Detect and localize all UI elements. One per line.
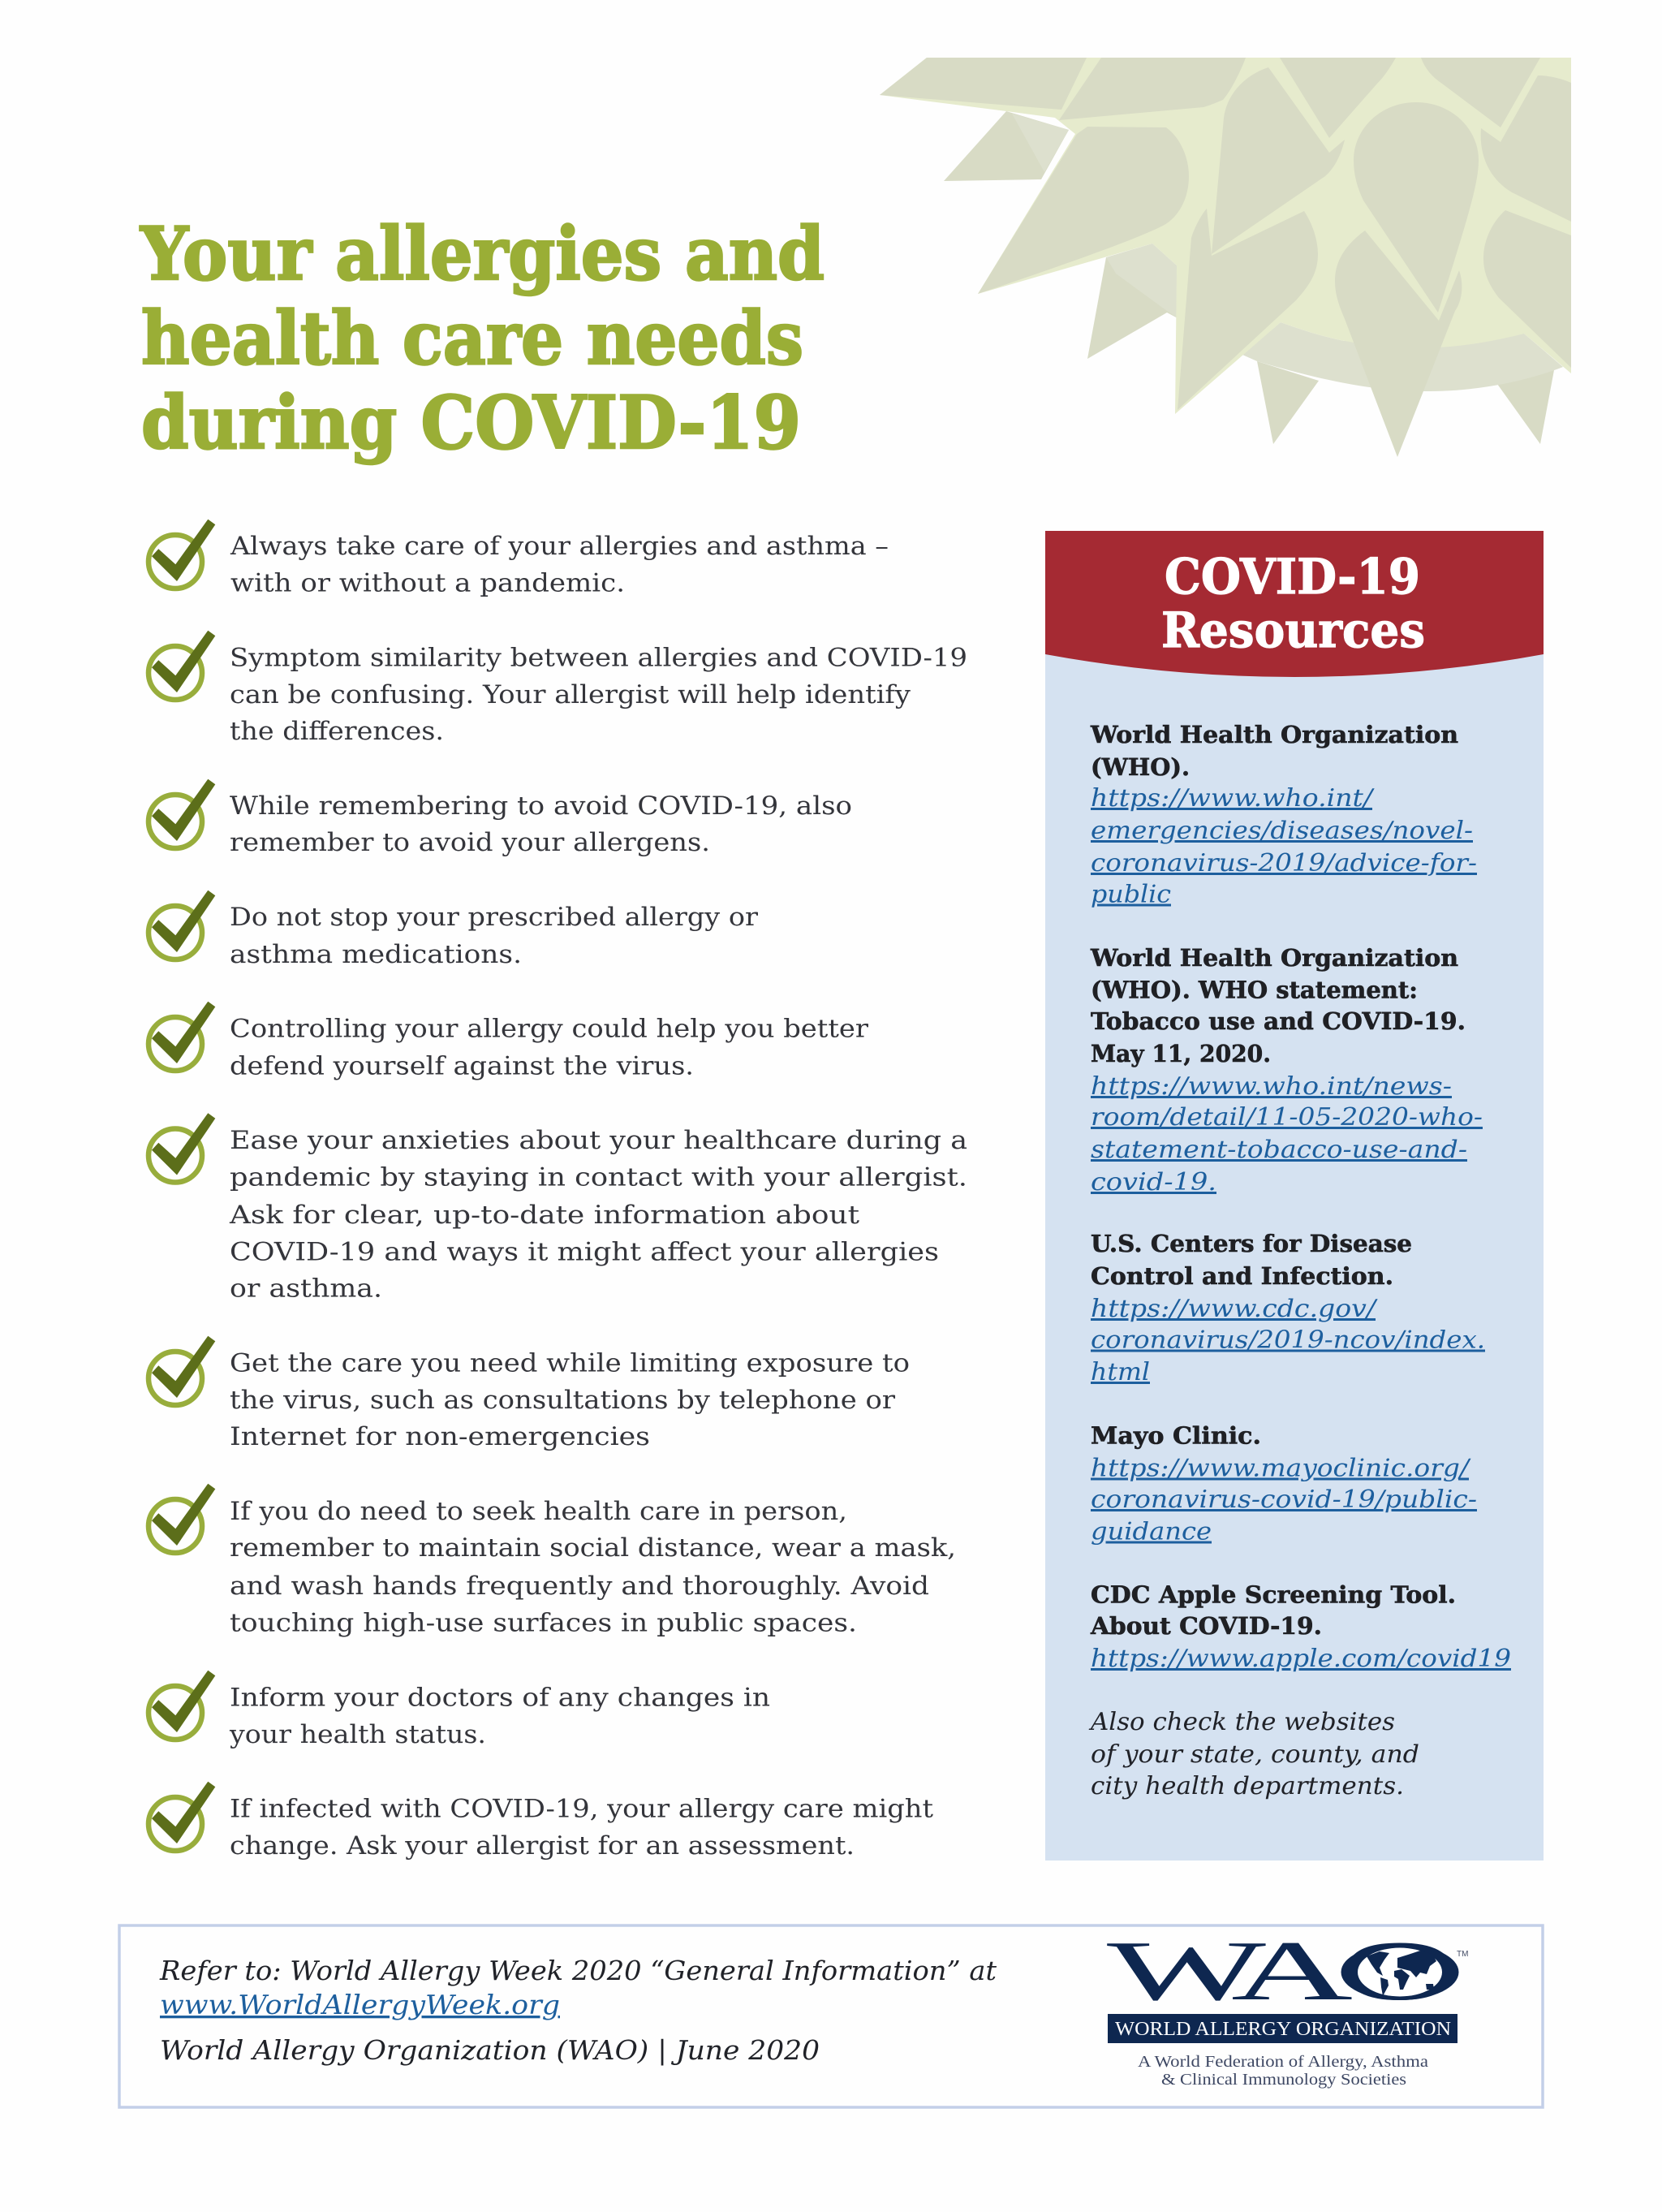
resource note: city health departments. — [1091, 1772, 1404, 1800]
footer reference text: World Allergy Organization (WAO) | June 2020 — [160, 2034, 820, 2066]
checklist item 3: remember to avoid your allergens. — [230, 828, 710, 857]
resource: CDC Apple screening tool: https://www.apple.com/covid19 — [1091, 1645, 1511, 1673]
resource: CDC Apple screening tool — [1090, 1581, 1511, 1673]
checklist item 7: Get the care you need while limiting exposure to — [230, 1349, 910, 1378]
title: Your allergies and — [140, 211, 825, 297]
resource: CDC — [1091, 1230, 1485, 1386]
checklist item 9 — [149, 1671, 770, 1749]
resource: WHO tobacco statement: World Health Organization — [1090, 944, 1458, 972]
resource: CDC: Control and Infection. — [1091, 1262, 1393, 1290]
panel header: Resources — [1161, 602, 1425, 659]
resource: WHO advice: (WHO). — [1091, 753, 1190, 781]
footer reference text: Refer to: World Allergy Week 2020 “General Information” at — [159, 1955, 997, 1986]
resource: WHO advice: https://www.who.int/ — [1091, 784, 1375, 813]
checklist item 7 — [149, 1336, 910, 1451]
checklist item 1: Always take care of your allergies and asthma – — [230, 532, 889, 561]
panel header — [1045, 531, 1544, 677]
checklist item 4 — [149, 890, 758, 969]
checklist item 1: with or without a pandemic. — [230, 568, 625, 597]
checklist item 3 — [149, 779, 852, 857]
checklist item 2 — [149, 631, 967, 746]
resource: Mayo Clinic: coronavirus-covid-19/public- — [1091, 1485, 1477, 1514]
resource note — [1088, 1708, 1419, 1800]
virus illustration — [880, 58, 1571, 457]
checklist item 9: your health status. — [229, 1720, 486, 1749]
checklist item 1 — [149, 520, 889, 597]
checklist item 7: Internet for non-emergencies — [230, 1422, 650, 1451]
checklist item 10: change. Ask your allergist for an assessment. — [230, 1831, 855, 1861]
footer reference text — [159, 1955, 997, 2066]
checklist item 8: touching high-use surfaces in public spaces. — [230, 1609, 857, 1638]
WAO logo — [1107, 1923, 1468, 2089]
checklist item 8 — [149, 1484, 956, 1638]
resource: CDC Apple screening tool: CDC Apple Screening Tool. — [1091, 1581, 1456, 1609]
resource: WHO advice: public — [1091, 880, 1171, 909]
title: health care needs — [141, 295, 803, 382]
checklist item 6 — [149, 1113, 967, 1304]
checklist item 7: the virus, such as consultations by telephone or — [230, 1386, 895, 1415]
resource: WHO tobacco statement: May 11, 2020. — [1091, 1040, 1271, 1067]
resource: WHO tobacco statement: https://www.who.int/news- — [1091, 1072, 1452, 1101]
logo letters: O — [1341, 1923, 1458, 2018]
footer reference text: www.WorldAllergyWeek.org — [160, 1989, 560, 2020]
resource: CDC: U.S. Centers for Disease — [1091, 1230, 1412, 1257]
logo letters — [1107, 1923, 1458, 2018]
resource note: of your state, county, and — [1091, 1740, 1419, 1769]
title — [140, 211, 825, 466]
checklist item 6: pandemic by staying in contact with your allergist. — [230, 1162, 967, 1192]
checklist item 6: Ease your anxieties about your healthcare during a — [230, 1126, 967, 1155]
logo banner: WORLD ALLERGY ORGANIZATION — [1115, 2019, 1451, 2040]
resource: CDC: https://www.cdc.gov/ — [1091, 1295, 1378, 1323]
resource: CDC: coronavirus/2019-ncov/index. — [1091, 1326, 1485, 1354]
checklist item 2: can be confusing. Your allergist will help identify — [230, 680, 911, 709]
checklist item 6: or asthma. — [230, 1274, 382, 1304]
logo tagline: A World Federation of Allergy, Asthma — [1138, 2053, 1428, 2071]
checklist item 5: Controlling your allergy could help you better — [230, 1015, 868, 1044]
checklist item 6: Ask for clear, up-to-date information about — [229, 1201, 860, 1230]
resource: WHO tobacco statement: covid-19. — [1091, 1168, 1216, 1197]
panel header: COVID-19 — [1165, 549, 1420, 606]
panel: COVID-19 resources — [1045, 531, 1544, 1861]
logo tagline: & Clinical Immunology Societies — [1161, 2071, 1406, 2089]
checklist item 5 — [149, 1002, 868, 1081]
resource: WHO advice: World Health Organization — [1090, 721, 1458, 748]
checklist item 2: Symptom similarity between allergies and COVID-19 — [230, 643, 967, 672]
logo banner — [1108, 2014, 1457, 2043]
resource: WHO tobacco statement: statement-tobacco-use-and- — [1091, 1136, 1467, 1164]
resource: CDC: html — [1091, 1358, 1150, 1386]
checklist — [149, 520, 967, 1861]
resource: WHO tobacco statement — [1090, 944, 1483, 1197]
trademark: TM — [1457, 1950, 1468, 1959]
resource: WHO tobacco statement: room/detail/11-05-2020-who- — [1091, 1103, 1483, 1132]
checklist item 2: the differences. — [230, 717, 444, 746]
checklist item 3: While remembering to avoid COVID-19, also — [230, 791, 852, 821]
resource: WHO tobacco statement: Tobacco use and COVID-19. — [1091, 1007, 1466, 1035]
checklist item 4: asthma medications. — [230, 940, 522, 969]
logo letters: A — [1231, 1923, 1353, 2018]
resource: WHO advice: coronavirus-2019/advice-for- — [1091, 849, 1477, 877]
resource note: Also check the websites — [1088, 1708, 1395, 1736]
icon: globe — [1341, 1944, 1459, 2000]
resource: Mayo Clinic — [1091, 1422, 1477, 1546]
resource: Mayo Clinic: guidance — [1091, 1518, 1212, 1546]
resource: WHO tobacco statement: (WHO). WHO statement: — [1091, 976, 1418, 1003]
footer box — [119, 1923, 1543, 2107]
panel background — [1045, 531, 1544, 1861]
logo tagline — [1138, 2053, 1428, 2089]
logo letters: W — [1107, 1923, 1266, 2018]
resource: WHO advice — [1090, 721, 1477, 909]
checklist item 8: remember to maintain social distance, wear a mask, — [230, 1533, 956, 1563]
checklist item 10: If infected with COVID-19, your allergy care might — [230, 1794, 934, 1823]
resource: Mayo Clinic: Mayo Clinic. — [1091, 1422, 1261, 1450]
checklist item 6: COVID-19 and ways it might affect your allergies — [230, 1237, 939, 1266]
checklist item 5: defend yourself against the virus. — [230, 1052, 694, 1081]
checklist item 9: Inform your doctors of any changes in — [230, 1684, 770, 1713]
resource: CDC Apple screening tool: About COVID-19. — [1090, 1612, 1322, 1640]
checklist item 8: If you do need to seek health care in person, — [230, 1497, 847, 1526]
resource: Mayo Clinic: https://www.mayoclinic.org/ — [1091, 1455, 1471, 1482]
checklist item 4: Do not stop your prescribed allergy or — [230, 903, 758, 932]
resource: WHO advice: emergencies/diseases/novel- — [1091, 817, 1473, 845]
checklist item 8: and wash hands frequently and thoroughly. Avoid — [230, 1572, 929, 1601]
checklist item 10 — [149, 1782, 934, 1861]
title: during COVID-19 — [141, 380, 801, 466]
